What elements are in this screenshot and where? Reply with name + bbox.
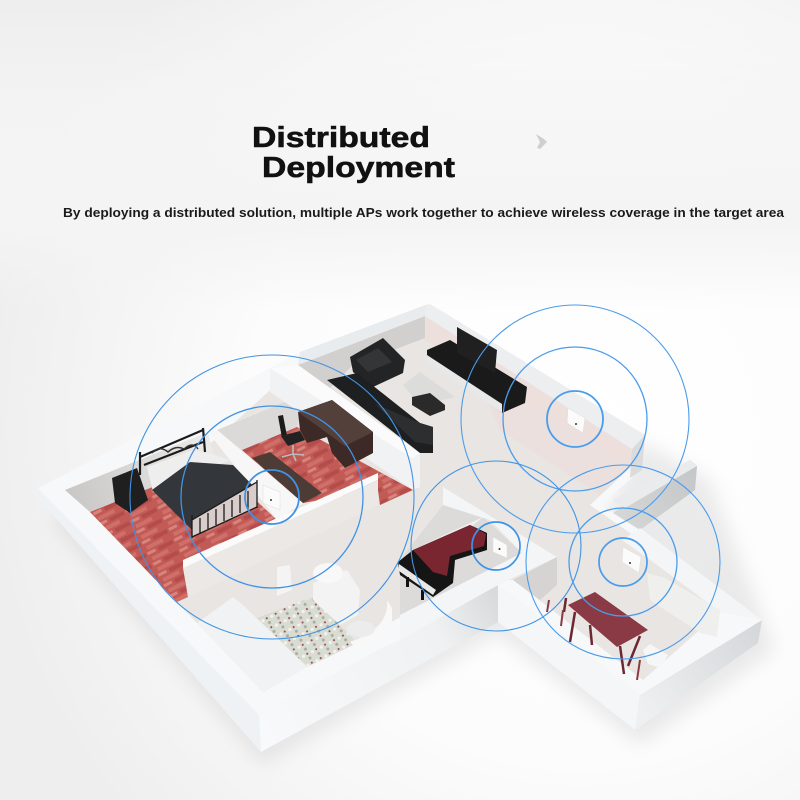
office chair bbox=[278, 415, 305, 461]
ottoman bbox=[412, 393, 445, 416]
vanity cabinet bbox=[313, 570, 360, 625]
black sofa bbox=[327, 373, 433, 453]
title: Distributed bbox=[252, 122, 430, 154]
study rug bbox=[252, 452, 322, 503]
bedroom back wall bbox=[65, 432, 215, 512]
soft ground shadow bbox=[50, 320, 775, 765]
black duvet bbox=[152, 462, 257, 530]
dining table bbox=[564, 592, 648, 674]
tall cabinet bbox=[277, 565, 292, 596]
footboard bbox=[192, 482, 257, 537]
coverage rings: piano room AP bbox=[411, 461, 581, 631]
glass coffee table bbox=[403, 372, 455, 405]
access point: piano room bbox=[493, 537, 507, 558]
small grey mark bbox=[536, 134, 547, 149]
divider between bedroom and study bbox=[208, 430, 303, 520]
outer wall front faces bbox=[38, 488, 762, 752]
sink bbox=[313, 563, 343, 583]
title: Deployment bbox=[262, 152, 455, 184]
building top footprint bbox=[38, 304, 762, 715]
dining room bbox=[513, 557, 720, 680]
piano lid bbox=[412, 517, 483, 550]
living room back walls bbox=[298, 304, 645, 478]
study wood floor bbox=[242, 427, 413, 505]
access point: living room bbox=[567, 408, 585, 433]
coverage rings: bedroom AP bbox=[130, 355, 414, 639]
white cabinets bbox=[647, 573, 720, 637]
access point: dining room bbox=[622, 547, 641, 573]
pink floor tint along living room wall bbox=[470, 360, 632, 495]
wall between living room and study bbox=[270, 365, 420, 490]
bedroom wood floor bbox=[90, 462, 277, 602]
piano room wall top bbox=[400, 487, 557, 640]
bathroom bbox=[197, 563, 400, 700]
stone floor bbox=[90, 316, 720, 692]
bath wall bbox=[263, 618, 400, 700]
piano room floor bbox=[400, 505, 522, 615]
low bedroom front wall bbox=[183, 473, 378, 597]
stub wall with shadowed face bbox=[612, 460, 697, 530]
floor plan illustration bbox=[38, 304, 775, 765]
access point: bedroom bbox=[263, 485, 280, 510]
dining wing upper wall bbox=[622, 528, 762, 620]
patterned rug bbox=[257, 597, 357, 667]
armchair bbox=[350, 338, 405, 387]
pillows bbox=[147, 450, 230, 492]
headboard bbox=[140, 428, 205, 475]
television bbox=[457, 327, 497, 373]
toilet bbox=[347, 621, 375, 637]
coverage rings: living room AP bbox=[461, 305, 689, 533]
study back wall bbox=[217, 393, 307, 450]
subtitle text: By deploying a distributed solution, multiple APs work together to achieve wireless coverage in the target area bbox=[63, 206, 785, 220]
round partition bbox=[350, 600, 392, 652]
grand piano bbox=[398, 525, 487, 600]
coverage rings: dining room AP bbox=[526, 465, 720, 659]
bedroom nightstand bbox=[112, 468, 148, 513]
white chair bbox=[643, 644, 668, 668]
bed bbox=[140, 428, 257, 538]
desk bbox=[298, 400, 373, 468]
title bbox=[252, 122, 455, 184]
TV unit bbox=[427, 340, 527, 413]
left chair bbox=[547, 600, 563, 626]
